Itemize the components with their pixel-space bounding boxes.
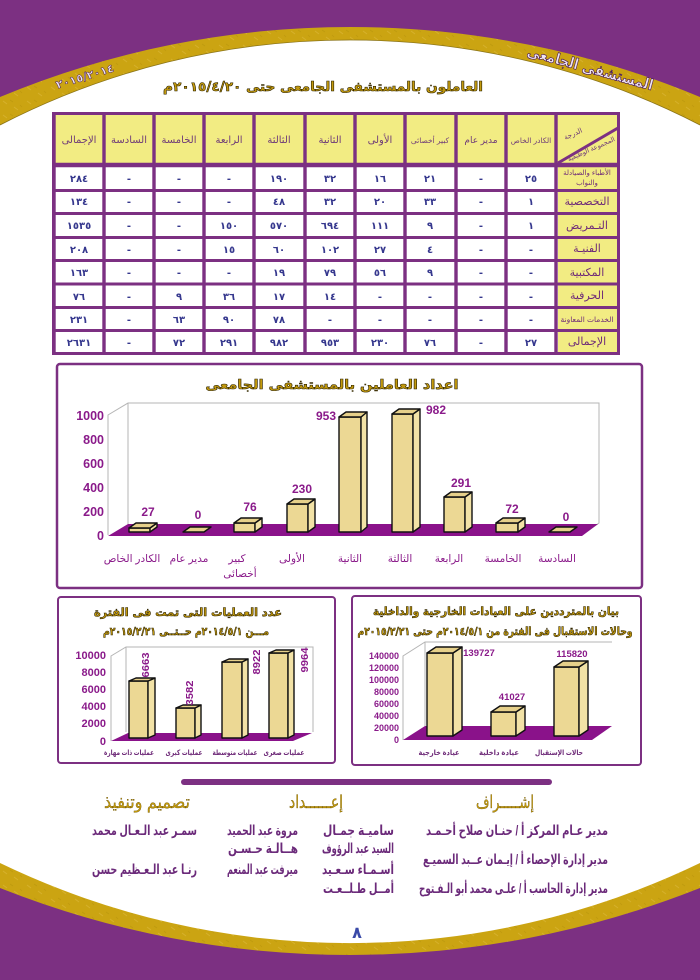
table numbers: ٩ bbox=[427, 221, 433, 232]
bar values: 76 bbox=[243, 500, 257, 514]
table numbers: ٢٥ bbox=[525, 174, 537, 185]
table header row: الإجمالى bbox=[62, 135, 96, 146]
table numbers: ١٠٢ bbox=[321, 245, 339, 256]
3d plot walls and floor bbox=[403, 642, 612, 740]
table numbers: - bbox=[227, 268, 231, 279]
category labels: الرابعة bbox=[435, 553, 463, 565]
bar values: 115820 bbox=[556, 649, 588, 660]
credits: preparation: هــالـة حـسـن bbox=[228, 841, 298, 856]
credits: design and execution: سمـر عبد الـعـال محمد bbox=[92, 823, 197, 838]
bar values: 72 bbox=[505, 502, 519, 516]
credits: preparation: أسـمـاء سـعـيد bbox=[322, 861, 394, 877]
y axis labels: 0 bbox=[100, 736, 106, 748]
panel: operations chart bbox=[58, 597, 335, 763]
category labels: كبير bbox=[227, 553, 246, 565]
table numbers: ٢٨٤ bbox=[70, 174, 88, 185]
title: staff table: العاملون بالمستشفى الجامعى حتى ٢٠١٥/٤/٢٠م bbox=[163, 80, 483, 95]
table numbers: ٣٢ bbox=[324, 174, 336, 185]
table numbers: - bbox=[127, 245, 131, 256]
credits: preparation: إعــــــداد bbox=[289, 792, 343, 812]
y axis labels: 140000 bbox=[369, 651, 399, 661]
table numbers: ٧٢ bbox=[173, 338, 185, 349]
bar values: 0 bbox=[563, 510, 570, 524]
chart title: اعداد العاملين بالمستشفى الجامعى bbox=[206, 378, 458, 393]
table row labels: الإجمالى bbox=[568, 336, 606, 348]
table numbers: - bbox=[177, 197, 181, 208]
table numbers: ١٤ bbox=[324, 292, 336, 303]
y axis labels: 0 bbox=[97, 529, 104, 543]
credits: preparation: مروة عبد الحميد bbox=[227, 823, 298, 838]
chart title bbox=[358, 605, 633, 638]
table numbers: ٧٨ bbox=[273, 315, 285, 326]
table numbers: ٦٩٤ bbox=[321, 221, 339, 232]
bar values bbox=[141, 647, 311, 706]
y axis labels: 0 bbox=[394, 735, 399, 745]
table header row: الكادر الخاص bbox=[511, 136, 551, 145]
table numbers: ٢١ bbox=[424, 174, 436, 185]
table numbers: - bbox=[529, 268, 533, 279]
3d plot walls and floor bbox=[108, 403, 599, 536]
table row labels: الخدمات المعاونة bbox=[561, 315, 613, 324]
category labels: عمليات ذات مهارة bbox=[104, 748, 154, 757]
table numbers: ١٩ bbox=[273, 268, 285, 279]
table numbers: ٦٣ bbox=[173, 315, 185, 326]
table header row bbox=[62, 133, 551, 146]
category labels: الثانية bbox=[338, 553, 362, 565]
chart title: وحالات الاستقبال فى الفترة من ٢٠١٤/٥/١م حتى ٢٠١٥/٢/٢١م bbox=[358, 625, 633, 638]
y axis labels: 600 bbox=[83, 457, 104, 471]
table header row: الخامسة bbox=[162, 135, 196, 146]
table row labels: التخصصية bbox=[564, 196, 610, 208]
credits: preparation: ساميـة جمـال bbox=[323, 823, 394, 838]
table numbers: - bbox=[479, 338, 483, 349]
table numbers: ٤ bbox=[427, 245, 433, 256]
chart title: عدد العمليات التى تمت فى الفترة bbox=[94, 606, 282, 619]
table numbers: ١٥ bbox=[223, 245, 235, 256]
credits: design and execution bbox=[92, 792, 197, 877]
table numbers: ٩ bbox=[427, 268, 433, 279]
bar values: 230 bbox=[292, 482, 312, 496]
bar values bbox=[463, 648, 588, 703]
table row labels: الأطباء والصيادلة bbox=[563, 168, 611, 177]
bar values: 982 bbox=[426, 403, 446, 417]
panel: clinics visitors chart bbox=[352, 596, 641, 765]
table: staff by grade bbox=[52, 112, 620, 355]
table numbers: ٣٢ bbox=[324, 197, 336, 208]
credits: supervision: إشـــــراف bbox=[476, 792, 534, 813]
table numbers: ٢٠ bbox=[374, 197, 386, 208]
credits: design and execution: رنـا عبد الـعـظيم حسن bbox=[92, 862, 197, 877]
y axis labels: 100000 bbox=[369, 675, 399, 685]
table numbers: - bbox=[479, 292, 483, 303]
3d plot walls and floor bbox=[111, 647, 313, 741]
y axis labels: 20000 bbox=[374, 723, 399, 733]
table numbers: - bbox=[127, 174, 131, 185]
table numbers: - bbox=[479, 221, 483, 232]
table numbers: ٥٧٠ bbox=[270, 221, 288, 232]
table row labels: الحرفية bbox=[570, 290, 604, 302]
table numbers: - bbox=[127, 315, 131, 326]
bars bbox=[129, 409, 577, 532]
chart title: مـــن ٢٠١٤/٥/١م حــتــى ٢٠١٥/٢/٢١م bbox=[103, 625, 269, 638]
y axis labels: 6000 bbox=[82, 684, 106, 696]
table numbers: ٢٦٣١ bbox=[67, 338, 91, 349]
table numbers: - bbox=[479, 197, 483, 208]
table numbers: ٢٠٨ bbox=[70, 245, 88, 256]
banner label: year: ٢٠١٥/٢٠١٤ bbox=[54, 62, 116, 92]
table numbers: ٥٦ bbox=[374, 268, 386, 279]
table header row: كبير أخصائى bbox=[411, 135, 450, 145]
y axis labels: 200 bbox=[83, 505, 104, 519]
table numbers: ٩٨٢ bbox=[270, 338, 288, 349]
table numbers: - bbox=[127, 292, 131, 303]
table header row: الأولى bbox=[368, 133, 392, 146]
table numbers: - bbox=[127, 221, 131, 232]
bar values: 291 bbox=[451, 476, 471, 490]
table numbers: ٤٨ bbox=[273, 197, 285, 208]
table row labels: والنواب bbox=[576, 180, 598, 187]
diagonal header cell bbox=[558, 128, 618, 163]
table numbers: ١٩٠ bbox=[270, 174, 288, 185]
panel: staff counts chart bbox=[57, 364, 642, 588]
bars bbox=[129, 650, 294, 738]
table numbers: - bbox=[479, 245, 483, 256]
table numbers: - bbox=[177, 174, 181, 185]
category labels: السادسة bbox=[538, 553, 576, 565]
chart title bbox=[94, 606, 282, 638]
credits: preparation: أمــل طـلــعـت bbox=[323, 880, 394, 896]
category labels: عيادة داخلية bbox=[479, 748, 519, 757]
table numbers: ١ bbox=[528, 221, 534, 232]
credits: preparation: ميرفت عبد المنعم bbox=[227, 862, 298, 877]
table numbers: - bbox=[529, 245, 533, 256]
table numbers: - bbox=[428, 292, 432, 303]
table numbers: ٧٩ bbox=[324, 268, 336, 279]
table header row: الثالثة bbox=[267, 135, 291, 146]
table numbers: - bbox=[177, 268, 181, 279]
y axis labels: 120000 bbox=[369, 663, 399, 673]
category labels: عمليات كبرى bbox=[166, 748, 202, 757]
table numbers: - bbox=[177, 221, 181, 232]
credits: supervision: مدير إدارة الإحصاء أ / إيـمان عــبد السميـع bbox=[423, 851, 608, 867]
category labels: الأولى bbox=[279, 552, 305, 565]
table numbers: - bbox=[378, 292, 382, 303]
table numbers: - bbox=[529, 315, 533, 326]
table numbers: - bbox=[378, 315, 382, 326]
diagonal header cell: الدرجة bbox=[563, 128, 584, 142]
diagonal header cell: المجموعة الوظيفية bbox=[567, 136, 616, 163]
table numbers bbox=[67, 174, 537, 349]
bar values: 6663 bbox=[141, 652, 152, 678]
table header row: مدير عام bbox=[464, 135, 498, 145]
table numbers: ٦٠ bbox=[273, 245, 285, 256]
y axis labels: 800 bbox=[83, 433, 104, 447]
category labels: عمليات متوسطة bbox=[212, 748, 258, 757]
table numbers: - bbox=[127, 338, 131, 349]
table numbers: ٧٦ bbox=[424, 338, 436, 349]
table numbers: ١٦٣ bbox=[70, 268, 88, 279]
credits: supervision: مدير عـام المركز أ / حنـان صلاح أحـمـد bbox=[426, 822, 608, 839]
category labels: أخصائى bbox=[223, 566, 257, 580]
table numbers: ٢٩١ bbox=[220, 338, 238, 349]
bar values: 3582 bbox=[185, 680, 196, 706]
table header row: الرابعة bbox=[215, 135, 243, 146]
table row labels bbox=[561, 168, 613, 348]
y axis labels: 1000 bbox=[76, 409, 104, 423]
table numbers: ٢٣٠ bbox=[371, 338, 389, 349]
y axis labels bbox=[76, 409, 104, 543]
y axis labels bbox=[75, 650, 106, 748]
table numbers: ٢٧ bbox=[374, 245, 386, 256]
bar values: 0 bbox=[195, 508, 202, 522]
bar values bbox=[141, 403, 570, 524]
bar values: 41027 bbox=[499, 692, 525, 703]
category labels: عمليات صغرى bbox=[264, 748, 304, 757]
table numbers: ٩٠ bbox=[223, 315, 235, 326]
table numbers: ٢٣١ bbox=[70, 315, 88, 326]
y axis labels: 400 bbox=[83, 481, 104, 495]
table numbers: ٧٦ bbox=[73, 292, 85, 303]
category labels: حالات الإستقبال bbox=[535, 748, 583, 757]
y axis labels: 2000 bbox=[82, 718, 106, 730]
bar values: 139727 bbox=[463, 648, 495, 659]
category labels: الخامسة bbox=[485, 553, 521, 565]
table numbers: - bbox=[479, 268, 483, 279]
category labels: مدير عام bbox=[170, 553, 208, 565]
table numbers: - bbox=[328, 315, 332, 326]
category labels bbox=[418, 748, 583, 757]
credits: supervision bbox=[419, 792, 608, 896]
table numbers: - bbox=[127, 268, 131, 279]
credits: design and execution: تصميم وتنفيذ bbox=[104, 792, 190, 813]
bar values: 8922 bbox=[252, 649, 263, 674]
category labels bbox=[104, 552, 576, 580]
bottom banner: gold arc and purple bbox=[0, 863, 700, 980]
table numbers: - bbox=[428, 315, 432, 326]
table numbers: ٩٥٣ bbox=[321, 338, 339, 349]
page number: ٨ bbox=[352, 923, 362, 942]
table numbers: - bbox=[177, 245, 181, 256]
table row labels: الفنيـة bbox=[573, 243, 601, 255]
category labels bbox=[104, 748, 304, 757]
table numbers: ١١١ bbox=[371, 221, 389, 232]
table numbers: ٣٦ bbox=[223, 292, 235, 303]
table numbers: ١ bbox=[528, 197, 534, 208]
y axis labels: 8000 bbox=[82, 667, 106, 679]
table numbers: - bbox=[127, 197, 131, 208]
top banner: purple and gold arc bbox=[0, 0, 700, 125]
chart title: بيان بالمترددين على العيادات الخارجية والداخلية bbox=[373, 605, 619, 618]
table row labels: التـمريض bbox=[566, 220, 608, 232]
y axis labels: 80000 bbox=[374, 687, 399, 697]
bars bbox=[427, 647, 588, 736]
table numbers: ١٥٠ bbox=[220, 221, 238, 232]
table numbers: ١٧ bbox=[273, 292, 285, 303]
table header row: الثانية bbox=[318, 135, 342, 146]
credits: preparation: السيد عبد الرؤوف bbox=[322, 841, 394, 856]
table numbers: - bbox=[479, 174, 483, 185]
category labels: عيادة خارجية bbox=[418, 748, 460, 757]
y axis labels: 40000 bbox=[374, 711, 399, 721]
bar values: 27 bbox=[141, 505, 155, 519]
table numbers: - bbox=[529, 292, 533, 303]
divider bar bbox=[181, 779, 552, 785]
table numbers: - bbox=[227, 174, 231, 185]
bar values: 953 bbox=[316, 409, 336, 423]
table row labels: المكتبية bbox=[570, 267, 604, 279]
table header row: السادسة bbox=[111, 135, 147, 146]
y axis labels: 60000 bbox=[374, 699, 399, 709]
y axis labels: 10000 bbox=[75, 650, 106, 662]
table numbers: ٢٧ bbox=[525, 338, 537, 349]
y axis labels bbox=[369, 651, 399, 745]
table numbers: ٩ bbox=[176, 292, 182, 303]
category labels: الثالثة bbox=[388, 553, 412, 565]
table numbers: - bbox=[227, 197, 231, 208]
table numbers: - bbox=[479, 315, 483, 326]
table numbers: ١٥٣٥ bbox=[67, 221, 91, 232]
y axis labels: 4000 bbox=[82, 701, 106, 713]
credits: preparation bbox=[227, 792, 394, 896]
table numbers: ١٦ bbox=[374, 174, 386, 185]
table numbers: ١٣٤ bbox=[70, 197, 88, 208]
table numbers: ٣٣ bbox=[424, 197, 436, 208]
category labels: الكادر الخاص bbox=[104, 553, 160, 565]
bar values: 9964 bbox=[300, 647, 311, 672]
banner label: hospital name: المستشفى الجامعى bbox=[525, 42, 655, 94]
